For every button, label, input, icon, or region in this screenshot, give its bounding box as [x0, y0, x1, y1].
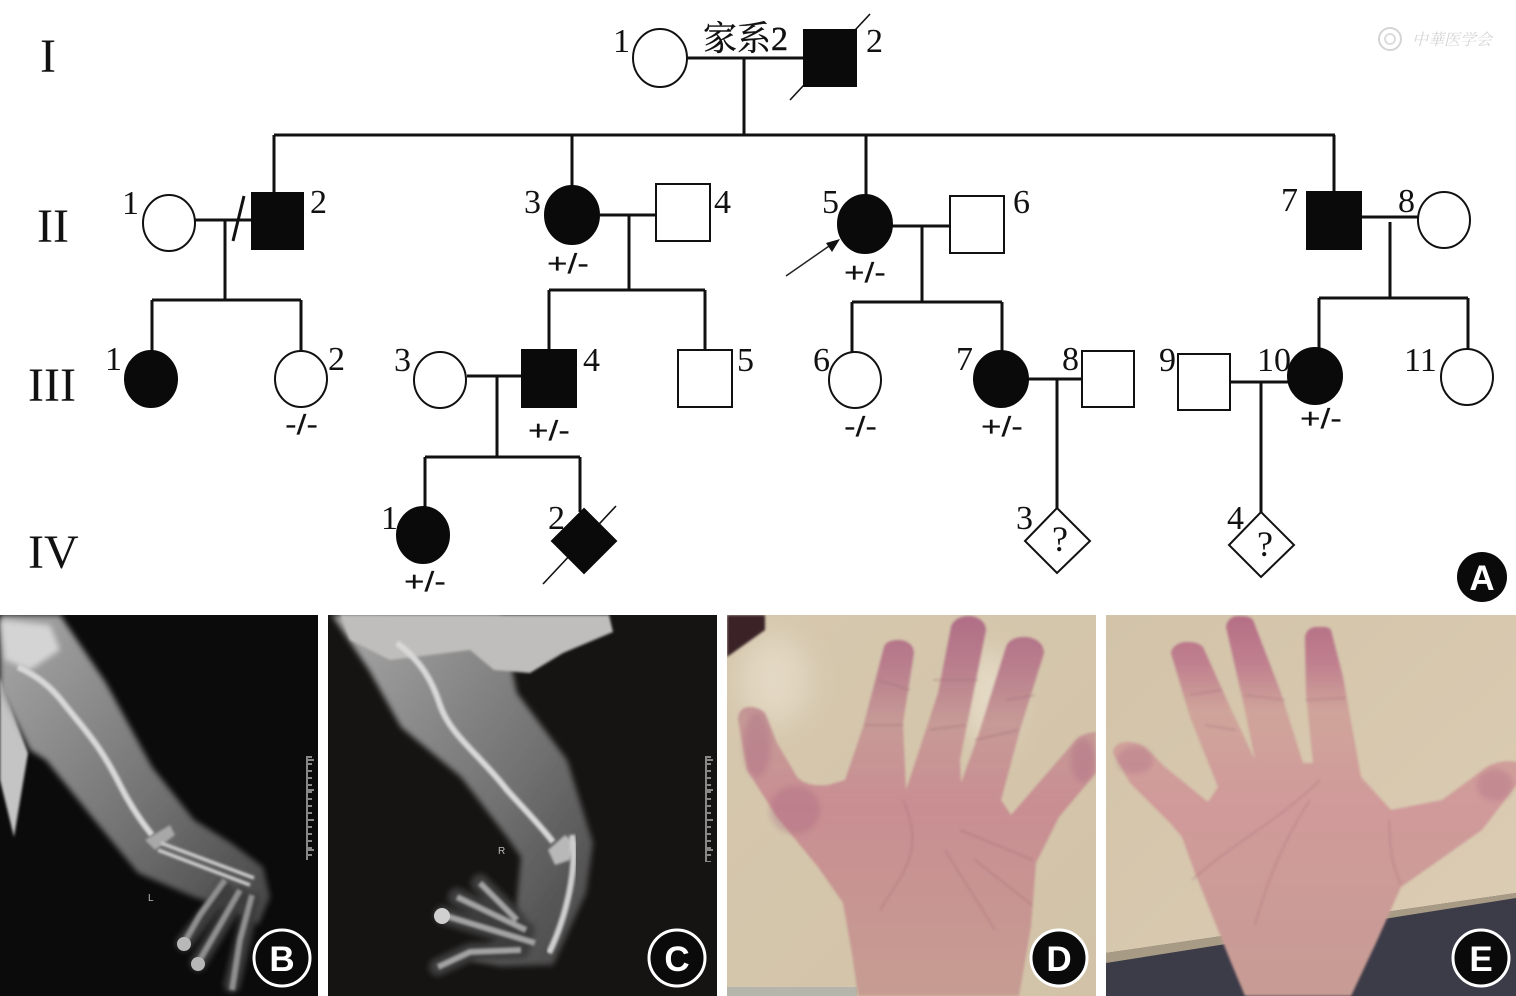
- generation III: numbers and genotypes: +/-: [981, 411, 1023, 442]
- l marker: L: [148, 893, 154, 904]
- generation III: numbers and genotypes: 6: [813, 342, 830, 379]
- humerus and forearm bones: [18, 667, 152, 835]
- generation III: numbers and genotypes: 1: [105, 341, 122, 378]
- r marker: R: [498, 846, 505, 857]
- arm bones: [397, 643, 553, 842]
- watermark logo: [1379, 27, 1494, 50]
- generation II: numbers and genotypes: +/-: [844, 257, 886, 288]
- finger creases: [865, 680, 1035, 740]
- badge B: B: [269, 940, 295, 979]
- hand: [1113, 616, 1516, 996]
- pedigree connecting lines: [152, 58, 1468, 515]
- arm soft tissue: [0, 615, 270, 925]
- generation II: numbers and genotypes: +/-: [547, 248, 589, 279]
- generation I: couple: 家系2: [703, 20, 788, 58]
- palm creases: [881, 865, 1031, 928]
- panel C: right arm x-ray: [328, 615, 717, 996]
- generation IV: numbers and genotypes: 3: [1016, 500, 1033, 537]
- generation I: couple: 1: [613, 23, 630, 60]
- arm soft tissue: [332, 615, 593, 966]
- table edge and dark floor: [1106, 893, 1516, 996]
- watermark logo: 中華医学会: [1412, 27, 1494, 50]
- generation IV: symbols: ?: [1052, 519, 1068, 559]
- generation III: numbers and genotypes: 11: [1404, 342, 1437, 379]
- generation II: numbers and genotypes: 4: [714, 184, 731, 221]
- hand: [738, 616, 1096, 996]
- generation II: numbers and genotypes: 6: [1013, 184, 1030, 221]
- generation labels: III: [28, 359, 76, 412]
- object and floor: [727, 615, 765, 657]
- proband arrow: [786, 239, 840, 276]
- generation III: numbers and genotypes: 7: [956, 341, 973, 378]
- fingertip shading: [1117, 746, 1513, 801]
- finger bones: [438, 883, 535, 967]
- generation IV: numbers and genotypes: 1: [381, 500, 398, 537]
- panel B: left arm x-ray: [0, 615, 318, 996]
- hand soft tissue: [438, 883, 526, 967]
- generation III: numbers and genotypes: 3: [394, 342, 411, 379]
- chest and shoulder region: [340, 615, 613, 673]
- generation III: numbers and genotypes: 4: [583, 342, 600, 379]
- generation III: numbers and genotypes: +/-: [1300, 403, 1342, 434]
- generation labels: [28, 30, 79, 579]
- generation labels: I: [40, 30, 56, 83]
- panel D: hand back photo: [727, 615, 1096, 996]
- hand soft tissue: [184, 890, 252, 985]
- fingertip and thumb shading: [743, 713, 1095, 834]
- generation II: numbers and genotypes: [122, 182, 1415, 288]
- generation II: numbers and genotypes: 7: [1281, 182, 1298, 219]
- generation labels: IV: [28, 526, 79, 579]
- generation II: numbers and genotypes: 8: [1398, 183, 1415, 220]
- badge D: [1031, 930, 1087, 986]
- shoulder bones: [0, 620, 60, 670]
- finger bones: [184, 880, 252, 990]
- generation III: numbers and genotypes: 5: [737, 342, 754, 379]
- panel A: pedigree chart: [28, 14, 1507, 602]
- finger creases: [1206, 698, 1312, 730]
- generation II: numbers and genotypes: 3: [524, 184, 541, 221]
- badge C: C: [664, 940, 690, 979]
- generation IV: symbols: [397, 506, 1294, 584]
- badge E: [1453, 930, 1509, 986]
- generation II: numbers and genotypes: 2: [310, 184, 327, 221]
- badge D: D: [1046, 940, 1072, 979]
- ruler: [706, 756, 713, 862]
- badge A: [1457, 552, 1507, 602]
- ruler: [307, 756, 314, 860]
- generation II: symbols: [143, 184, 1470, 253]
- badge B: [254, 930, 310, 986]
- badge A: A: [1469, 559, 1495, 598]
- badge E: E: [1469, 940, 1493, 979]
- generation II: numbers and genotypes: 1: [122, 185, 139, 222]
- generation III: numbers and genotypes: 8: [1062, 341, 1079, 378]
- generation IV: symbols: ?: [1257, 524, 1273, 564]
- generation III: numbers and genotypes: 2: [328, 341, 345, 378]
- body edge: [0, 677, 28, 837]
- panel E: hand palm photo: [1106, 615, 1516, 996]
- generation III: numbers and genotypes: 10: [1257, 342, 1291, 379]
- badge C: [649, 930, 705, 986]
- generation IV: numbers and genotypes: 2: [548, 500, 565, 537]
- generation III: numbers and genotypes: +/-: [528, 415, 570, 446]
- generation I: couple: 2: [866, 23, 883, 60]
- generation III: symbols: [125, 348, 1493, 410]
- palm creases: [1192, 780, 1401, 925]
- generation III: numbers and genotypes: [105, 341, 1437, 446]
- generation labels: II: [37, 200, 69, 253]
- generation III: numbers and genotypes: -/-: [844, 411, 877, 442]
- generation III: numbers and genotypes: 9: [1159, 342, 1176, 379]
- generation III: numbers and genotypes: -/-: [285, 409, 318, 440]
- generation IV: numbers and genotypes: +/-: [404, 566, 446, 597]
- generation II: numbers and genotypes: 5: [822, 184, 839, 221]
- generation IV: numbers and genotypes: [381, 500, 1244, 597]
- generation IV: numbers and genotypes: 4: [1227, 500, 1244, 537]
- generation I: couple: [613, 14, 883, 100]
